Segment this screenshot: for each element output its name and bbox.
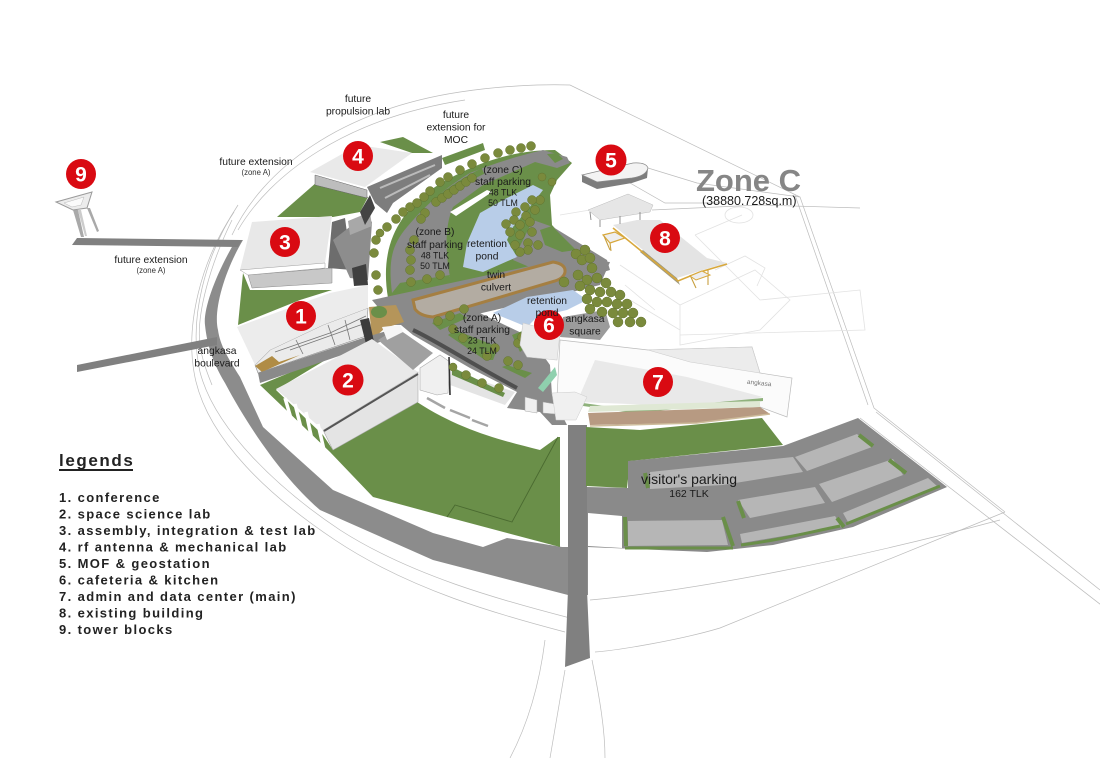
zone C area: (38880.728sq.m) [702, 194, 797, 208]
marker 4: 4 [352, 146, 364, 168]
label: zone C parking: 48 TLK [489, 188, 517, 198]
visitor parking road [587, 418, 947, 552]
future extension road west 2 [77, 337, 217, 372]
label: zone B parking: (zone B) [416, 227, 454, 238]
marker 5: 5 [605, 150, 617, 172]
label: twin culvert: twin [487, 270, 505, 281]
lawn between buildings 3 and 4 [277, 182, 368, 217]
label: zone C parking: (zone C) [483, 165, 523, 176]
label: future extension north: (zone A) [241, 168, 271, 177]
marker 1 [286, 301, 316, 331]
marker 4 [343, 141, 373, 171]
label: zone C parking: staff parking [475, 177, 531, 188]
marker 5 [596, 144, 626, 176]
marker 8 [650, 223, 680, 253]
label: retention pond south: pond [536, 308, 559, 319]
marker 6 [534, 310, 564, 340]
zone A planters [432, 313, 532, 378]
road east of pond [513, 220, 610, 283]
twin culvert island [413, 262, 565, 317]
marker 7 [643, 367, 673, 397]
zone C heading: Zone C [696, 163, 801, 198]
label: future extension west: (zone A) [136, 266, 166, 275]
building 6 [520, 323, 560, 360]
label: zone B parking: 50 TLM [420, 261, 450, 271]
building 7: angkasa [747, 379, 772, 388]
legend list: 5. MOF & geostation [59, 556, 211, 571]
building 5 [582, 163, 648, 189]
label: twin culvert: culvert [481, 282, 511, 294]
legend list: 9. tower blocks [59, 622, 174, 637]
marker 3: 3 [279, 232, 291, 254]
zone C site plan lines [560, 205, 865, 345]
building 2 [276, 325, 555, 450]
marker 3 [270, 227, 300, 257]
dark road edge arc [413, 330, 517, 388]
label: future propulsion lab: future [345, 94, 371, 105]
label: zone A parking: 24 TLM [467, 346, 497, 356]
building 1 [237, 285, 390, 383]
lawn behind building 4 [380, 137, 433, 153]
label: zone A parking: staff parking [454, 325, 510, 336]
marker 6: 6 [543, 314, 555, 338]
legend list: 4. rf antenna & mechanical lab [59, 540, 288, 554]
marker 2: 2 [342, 370, 354, 392]
culvert road [372, 258, 610, 325]
label: zone A parking: 23 TLK [468, 336, 496, 346]
label: future extension for MOC: future [443, 110, 469, 121]
label: future extension for MOC: extension for [427, 122, 486, 134]
legend list: 6. cafeteria & kitchen [59, 572, 219, 588]
plaza [369, 305, 404, 340]
label: zone A parking: (zone A) [463, 313, 501, 324]
vertical access road [565, 425, 590, 667]
label: angkasa boulevard: angkasa [198, 346, 236, 357]
label: future extension west: future extension [114, 255, 188, 266]
marker 2 [332, 364, 364, 396]
label: visitor parking: visitor's parking [641, 471, 737, 487]
marker 8: 8 [659, 228, 671, 250]
site boundary lines [192, 85, 1100, 758]
label: retention pond south: retention [527, 296, 567, 307]
label: future extension north: future extension [219, 157, 293, 168]
legend list [59, 490, 317, 637]
retention pond south [493, 290, 587, 327]
central green with parking [386, 150, 575, 298]
building 7 [538, 340, 792, 426]
marker 1: 1 [295, 306, 307, 328]
building 4 [310, 145, 442, 225]
marker 7: 7 [652, 372, 664, 394]
label: retention pond north: retention [467, 239, 507, 250]
label: visitor parking: 162 TLK [669, 488, 709, 500]
main ring road [205, 240, 588, 595]
legend list: 7. admin and data center (main) [59, 589, 297, 604]
retention pond north [463, 185, 543, 272]
label: future extension for MOC: MOC [444, 135, 469, 146]
label: angkasa square: angkasa [566, 314, 604, 325]
label: retention pond north: pond [476, 252, 499, 262]
angkasa square [560, 310, 610, 340]
legend list: 3. assembly, integration & test lab [59, 523, 317, 538]
lawn beside building 3 [238, 273, 332, 325]
building 3 [240, 212, 372, 288]
legend list: 8. existing building [59, 606, 204, 620]
legend list: 2. space science lab [59, 506, 212, 522]
red markers [66, 141, 680, 397]
future extension road west 1 [72, 238, 242, 247]
label: zone C parking: 50 TLM [488, 198, 518, 208]
label: angkasa boulevard: boulevard [194, 358, 240, 370]
trees [370, 142, 646, 392]
legend list: 1. conference [59, 490, 161, 505]
marker 9: 9 [75, 164, 87, 186]
label: future propulsion lab: propulsion lab [326, 106, 390, 118]
label: angkasa square: square [569, 326, 601, 338]
main lawn [260, 353, 560, 547]
label: zone B parking: staff parking [407, 240, 463, 251]
marker 9 [66, 159, 96, 189]
tower icon 9 [56, 192, 99, 237]
legends heading: legends [59, 451, 134, 470]
label: zone B parking: 48 TLK [421, 250, 449, 260]
building 8 [588, 194, 727, 288]
planter behind arc [450, 367, 515, 405]
south road [395, 305, 567, 425]
lawn in front of building 7 [586, 418, 783, 488]
